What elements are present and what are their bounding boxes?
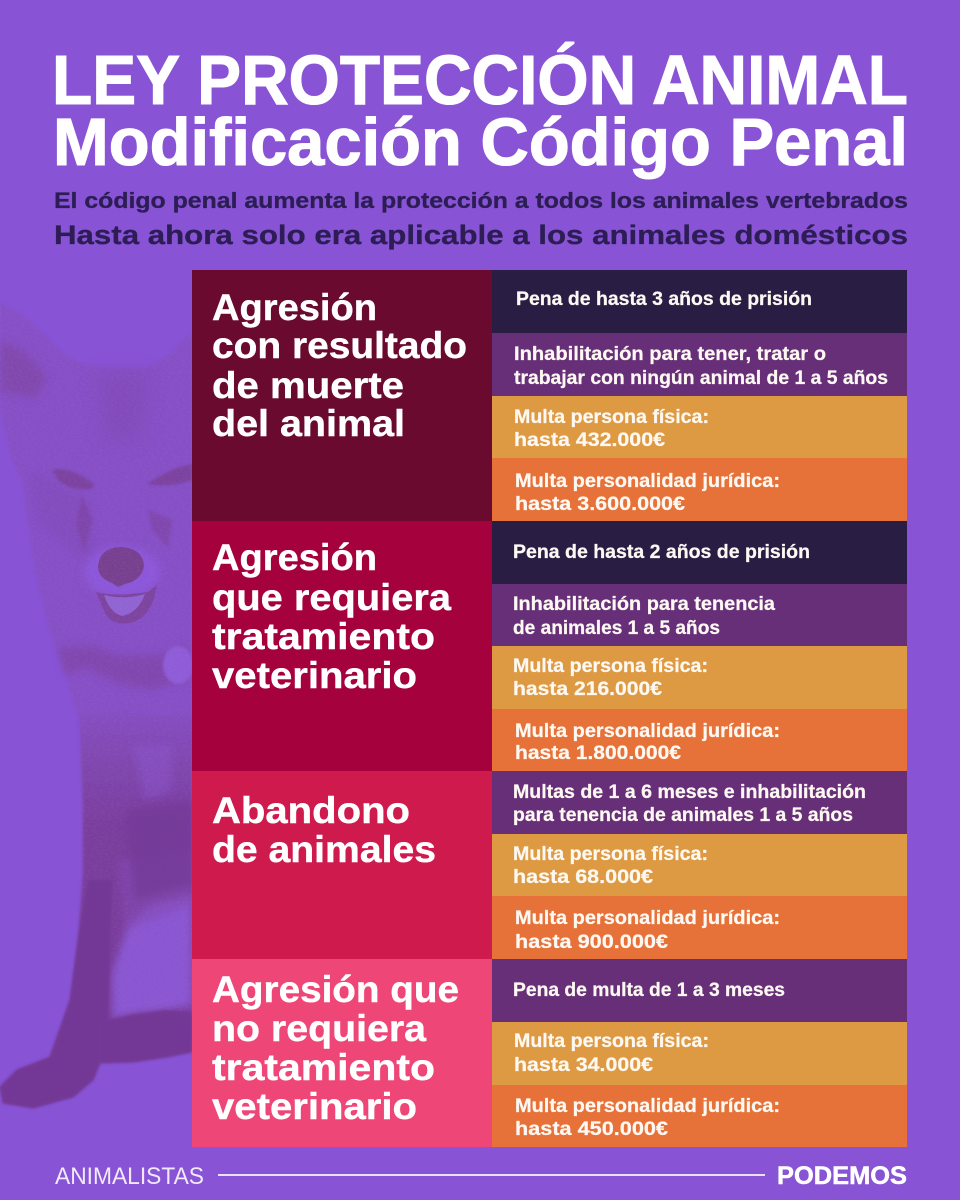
category heading: Agresión [212,287,377,328]
fox chest fur [58,645,192,748]
row: multa personalidad jurídica [492,1085,907,1147]
row: prisión [492,521,907,584]
fox cheek tuft [163,646,193,684]
row: multa personalidad jurídica: hasta 3.600.000€ [515,494,685,515]
title [52,41,908,180]
fox hind foot [100,1010,192,1063]
footer logo: podemos: PODEMOS [777,1162,907,1190]
row: multa personalidad jurídica [492,709,907,771]
row: inhabilitación: de animales 1 a 5 años [513,618,720,639]
fox nose [98,547,144,587]
category heading: del animal [212,403,405,444]
row: multa persona física: hasta 34.000€ [514,1055,653,1076]
title: LEY PROTECCIÓN ANIMAL [52,41,908,119]
category heading [212,287,467,444]
category box [192,771,492,959]
row: prisión: Pena de hasta 3 años de prisión [516,289,812,310]
category heading: de muerte [212,365,404,406]
row: multa personalidad jurídica: Multa personalidad jurídica: [515,471,780,492]
fox mouth [96,585,157,624]
row: multa personalidad jurídica: hasta 450.000€ [515,1119,668,1140]
panel: abandono de animales [192,771,907,959]
category box [192,270,492,521]
row: multa persona física [492,1022,907,1085]
footer rule [218,1174,765,1176]
row: prisión: Pena de hasta 2 años de prisión [513,542,810,563]
row: multas e inhabilitación: para tenencia de animales 1 a 5 años [513,805,853,826]
illustration: fox [0,303,193,1108]
category heading [212,790,436,870]
panel: agresión con resultado de muerte [192,270,907,521]
fox lighter neck fur [132,745,172,800]
category heading: que requiera [212,577,451,618]
fox dark flank [125,800,192,900]
category heading: Abandono [212,790,410,831]
category heading: veterinario [212,655,417,696]
panel: agresión que requiera tratamiento [192,521,907,771]
footer [55,1162,907,1190]
row: inhabilitación: trabajar con ningún animal de 1 a 5 años [514,368,888,389]
category heading [212,969,459,1127]
fox fur texture [0,303,192,1108]
category heading: Agresión que [212,969,459,1010]
panel: agresión que no requiera tratamiento [192,959,907,1147]
row: multa personalidad jurídica [492,896,907,959]
fox front leg and paw [0,880,112,1108]
category box [192,521,492,771]
row: multas e inhabilitación [492,771,907,834]
row: multa persona física [492,646,907,709]
row: multa persona física: Multa persona física: [514,407,709,428]
subtitle [54,188,908,250]
subtitle: El código penal aumenta la protección a todos los animales vertebrados [54,188,908,213]
row: multa persona física: Multa persona física: [513,844,708,865]
fox eyes [52,464,192,489]
fox muzzle [84,546,160,598]
row: multas e inhabilitación: Multas de 1 a 6 meses e inhabilitación [513,782,866,803]
category heading: Agresión [212,537,377,578]
row: multa personalidad jurídica: hasta 900.000€ [515,932,668,953]
row: multa personalidad jurídica: Multa personalidad jurídica: [515,1096,780,1117]
row: multa personalidad jurídica [492,458,907,521]
row: inhabilitación: Inhabilitación para tener, tratar o [514,344,826,365]
category box [192,959,492,1147]
footer label: animalistas: ANIMALISTAS [55,1163,204,1190]
subtitle: Hasta ahora solo era aplicable a los animales domésticos [54,220,908,250]
row: multa persona física: hasta 68.000€ [513,867,653,888]
row: multa persona física: Multa persona física: [513,656,708,677]
category heading: veterinario [212,1086,417,1127]
category heading [212,537,451,696]
row: inhabilitación: Inhabilitación para tenencia [513,594,775,615]
row: pena de multa [492,959,907,1022]
fox inner light fur [112,895,192,1018]
row: pena de multa: Pena de multa de 1 a 3 meses [513,980,785,1001]
category heading: tratamiento [212,1047,435,1088]
row: multa personalidad jurídica: Multa personalidad jurídica: [515,721,780,742]
category heading: de animales [212,829,436,870]
row: inhabilitación [492,584,907,646]
row: multa persona física: hasta 432.000€ [514,430,665,451]
row: multa personalidad jurídica: Multa personalidad jurídica: [515,908,780,929]
row: prisión [492,270,907,333]
row: multa personalidad jurídica: hasta 1.800.000€ [515,743,681,764]
row: multa persona física [492,396,907,458]
row: multa persona física [492,834,907,896]
row: inhabilitación [492,333,907,396]
row: multa persona física: Multa persona física: [514,1031,709,1052]
fox body and legs [0,715,192,1108]
title: Modificación Código Penal [53,105,908,180]
category heading: con resultado [212,325,467,366]
row: multa persona física: hasta 216.000€ [513,679,662,700]
category heading: no requiera [212,1008,426,1049]
category heading: tratamiento [212,616,435,657]
